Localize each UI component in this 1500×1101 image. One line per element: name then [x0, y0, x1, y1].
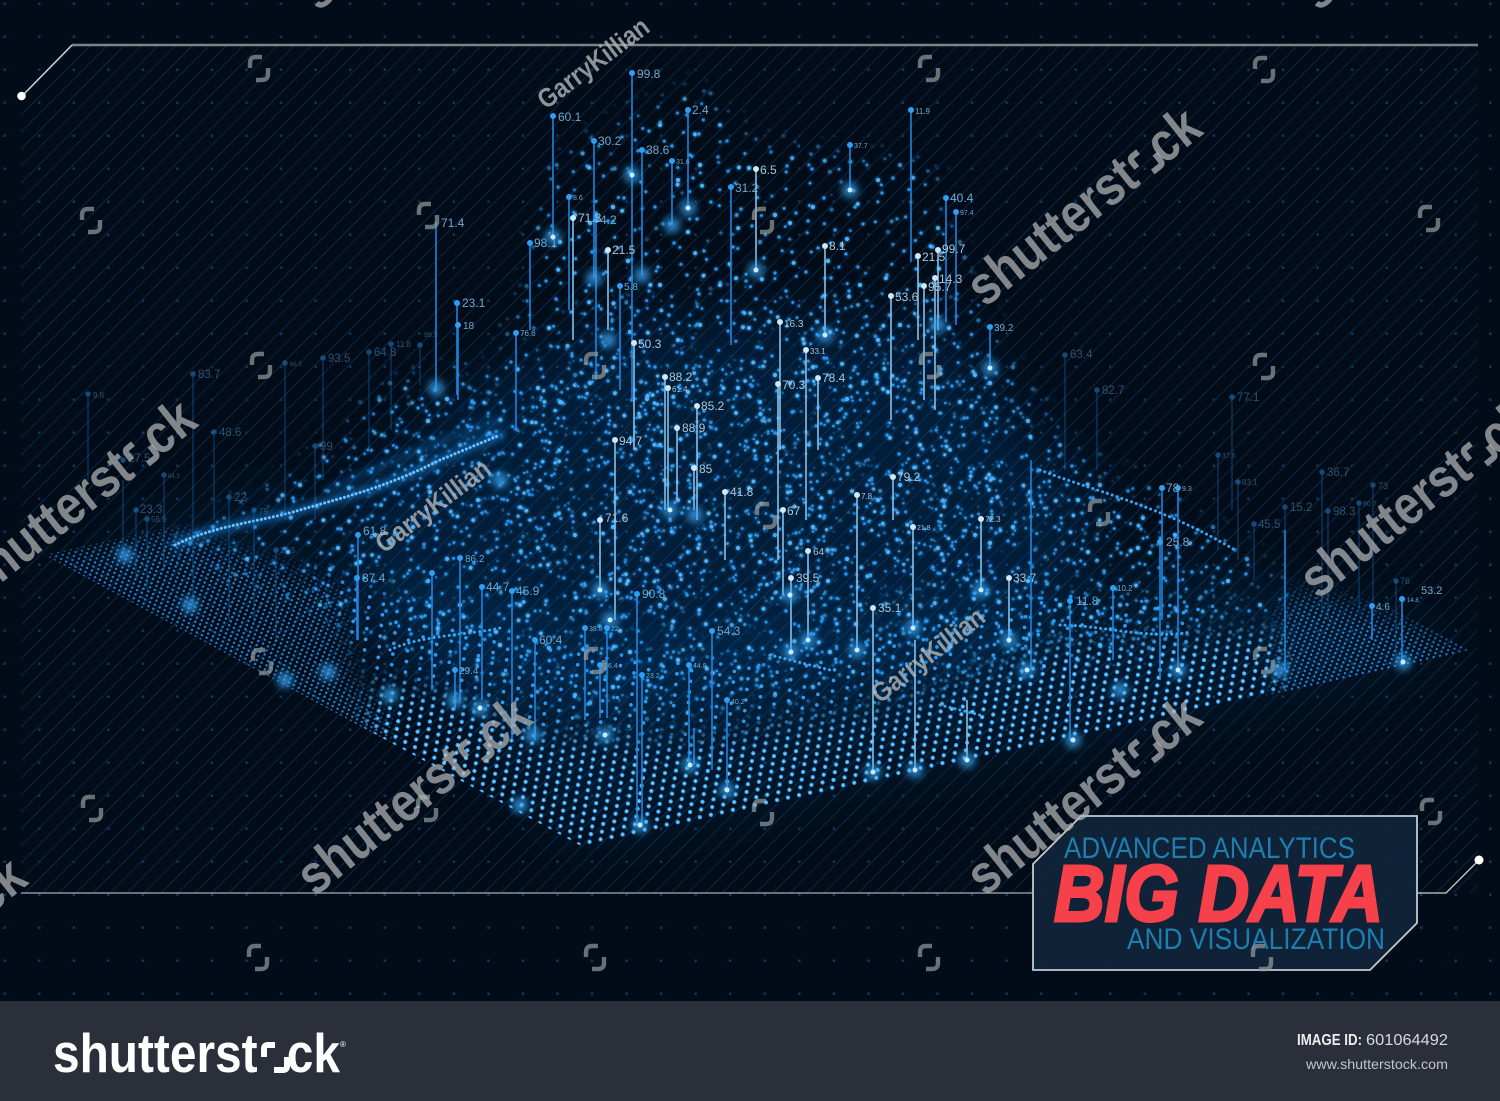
data stems: blue: 22: [611, 626, 619, 633]
data stems: pale bright: 21.8: [917, 525, 931, 532]
data stems: blue: 9.3: [1182, 486, 1192, 493]
data stems: blue: 53.2: [1421, 585, 1442, 597]
image id: 601064492: [1366, 1032, 1448, 1049]
data stems: dim outer: [88, 332, 1410, 660]
plane: near dense grid: [346, 612, 1302, 848]
data stems: blue: 18: [463, 321, 475, 332]
stem base glows: [125, 175, 1403, 825]
data stems: blue: 2.4: [692, 103, 709, 117]
data stems: dim outer: 11.8: [396, 340, 412, 349]
data stems: blue: 60.4: [539, 633, 563, 647]
data stems: pale bright: 99.7: [942, 242, 966, 256]
data stems: blue: 98.1: [534, 236, 558, 250]
data stems: blue: 90.8: [642, 587, 666, 601]
data stems: blue: 14.8: [1407, 598, 1419, 604]
data stems: dim outer: 68.3: [290, 362, 302, 368]
footer logo: ®: [340, 1040, 346, 1049]
data stems: dim outer: 63.4: [1070, 349, 1093, 361]
data stems: pale bright: [573, 163, 1037, 770]
title panel: [1033, 816, 1417, 970]
photographer watermarks: [370, 11, 991, 709]
data stems: dim outer: 83.7: [198, 369, 220, 381]
data stems: blue: 76.6: [520, 329, 536, 338]
data stems: blue: 44.8: [693, 663, 707, 670]
data stems: pale bright: 88.9: [682, 421, 706, 435]
data stems: pale bright: 53.6: [895, 290, 919, 304]
data stems: dim outer: 93.5: [328, 353, 350, 365]
data stems: dim outer: 23.3: [140, 504, 162, 516]
data stems: pale bright: 8.1: [829, 239, 846, 253]
data stems: pale bright: 88.2: [669, 370, 693, 384]
data stems: blue: 23.1: [462, 296, 486, 310]
data stems: pale bright: 6.5: [760, 163, 777, 177]
data stems: blue: 54.3: [717, 624, 741, 638]
data stems: blue: 5.8: [624, 282, 638, 293]
data stems: blue: 60.1: [558, 110, 582, 124]
frame: top line with node: [17, 45, 1478, 100]
data stems: blue: 86.4: [604, 663, 618, 670]
data stems: blue: 86.2: [465, 554, 485, 565]
data stems: pale bright: 16.3: [784, 319, 804, 330]
data stems: pale bright: 35.1: [878, 601, 902, 615]
data stems: dim outer: 56.9: [151, 515, 167, 524]
diagonal hatch panel: [21, 46, 1478, 893]
data stems: pale bright: 67: [787, 504, 801, 518]
data stems: pale bright: 79.2: [897, 470, 921, 484]
footer bar: [0, 1001, 1500, 1101]
data stems: dim outer: 9.8: [93, 391, 105, 400]
3D data terrain visualization: [45, 70, 1468, 848]
data stems: pale bright: 71.6: [605, 511, 629, 525]
data stems: blue: 8.6: [573, 195, 583, 202]
main title: BIG DATA: [1054, 849, 1383, 938]
data stems: pale bright: 33.1: [810, 347, 826, 356]
data stems: dim outer: 84.3: [168, 474, 180, 480]
data stems: blue: 11.8: [1076, 594, 1099, 608]
data stems: blue: 39.2: [994, 323, 1014, 334]
data stems: dim outer: 15.2: [1290, 502, 1312, 514]
data stems: blue: 44.7: [486, 580, 510, 594]
data stems: blue: 25.8: [1166, 535, 1190, 549]
data stems: dim outer: 22: [234, 492, 247, 504]
data stems: pale bright: 21.5: [922, 250, 946, 264]
data stems: pale bright: 7.8: [861, 492, 873, 501]
data stems: dim outer: 99: [320, 441, 333, 453]
data stems: pale bright: 61.4: [672, 385, 688, 394]
subtitle: and visualization: AND VISUALIZATION: [1127, 923, 1385, 956]
data stems: pale bright: 95.7: [928, 280, 952, 294]
data stems: pale bright: 64: [813, 547, 825, 558]
photographer watermarks: GarryKillian: [370, 453, 496, 559]
panel background: [1033, 816, 1417, 970]
data stems: blue: 4.2: [600, 213, 617, 227]
data stems: dim outer: 80.7: [1363, 501, 1377, 508]
data stems: pale bright: 70.3: [782, 378, 806, 392]
data stems: blue: 40.2: [731, 699, 745, 706]
data stems: blue: 30.2: [598, 134, 622, 148]
data stems: blue: 40.4: [950, 191, 974, 205]
data stems: dim outer: 98.3: [1333, 506, 1355, 518]
data stems: pale bright: 85.2: [701, 399, 725, 413]
website: www.shutterstock.com: [1305, 1056, 1448, 1072]
data stems: pale bright: 78.4: [822, 371, 846, 385]
shutterstock diagonal watermarks: shutterstock: [954, 683, 1213, 906]
data stems: dim outer: 76: [1400, 576, 1410, 586]
data stems: blue: 71.4: [441, 216, 465, 230]
data stems: blue: 38.8: [589, 626, 603, 633]
shutterstock diagonal watermarks: shutterstock: [284, 683, 543, 906]
data stems: dim outer: 64.8: [374, 347, 396, 359]
data stems: blue: 97.4: [960, 210, 974, 217]
data stems: blue: 10.2: [1117, 584, 1133, 593]
terrain glow haze: [60, 320, 1460, 840]
data stems: blue: 45.9: [516, 584, 540, 598]
data stems: pale bright: 41.8: [730, 485, 754, 499]
ridge wave: left: [175, 420, 1235, 715]
data stems: pale bright: 33.7: [1013, 571, 1037, 585]
data stems: dim outer: 48.6: [219, 427, 241, 439]
footer logo: shutterstock: [53, 1022, 340, 1084]
data stems: blue: 61.8: [363, 524, 387, 538]
data stems: pale bright: 71.3: [578, 211, 602, 225]
data stems: blue: 4.6: [1376, 602, 1390, 613]
data stems: dim outer: 36.7: [1327, 467, 1349, 479]
data stems: blue: 99.8: [637, 67, 661, 81]
data stems: dim outer: 45.5: [1258, 519, 1280, 531]
data stems: pale bright: 50.3: [638, 337, 662, 351]
data stems: blue: 87.4: [362, 571, 386, 585]
data stems: blue: 31.6: [676, 159, 690, 166]
frame: bottom line with node: [21, 856, 1484, 893]
scattered terrain particles: [170, 70, 1308, 736]
data stems: blue: 31.2: [735, 181, 759, 195]
subtitle: advanced analytics: ADVANCED ANALYTICS: [1064, 832, 1355, 865]
plane: distant corner grids: [45, 520, 1467, 748]
data stems: dim outer: 83.1: [1242, 478, 1258, 487]
data stems: dim outer: 73: [1378, 481, 1388, 491]
image id: IMAGE ID:: [1297, 1032, 1362, 1049]
data stems: pale bright: 39.5: [796, 571, 820, 585]
data stems: dim outer: 37.6: [1222, 453, 1236, 460]
data stems: dim outer: 27.5: [128, 453, 150, 465]
data stems: pale bright: 14.3: [939, 272, 963, 286]
photographer watermarks: GarryKillian: [532, 11, 655, 115]
plane: mid wide grid: [299, 556, 1244, 748]
data stems: dim outer: 99.9: [424, 332, 438, 339]
data stems: pale bright: 94.7: [619, 434, 643, 448]
data stems: blue: 23.2: [646, 673, 660, 680]
data stems: dim outer: 79: [259, 507, 268, 516]
data stems: blue: 78: [1166, 481, 1180, 495]
data stems: pale bright: 72.3: [985, 515, 1001, 524]
data stems: blue: 37.7: [854, 143, 868, 150]
data stems: blue: [357, 67, 1442, 825]
watermark marks: [82, 57, 1440, 969]
data stems: dim outer: 13.5: [280, 546, 296, 555]
data stems: dim outer: 82.7: [1102, 385, 1124, 397]
data stems: blue: 38.6: [646, 143, 670, 157]
data stems: pale bright: 21.5: [612, 243, 636, 257]
data stems: pale bright: 85: [699, 462, 713, 476]
data stems: blue: 11.9: [915, 107, 931, 116]
data stems: blue: 29.4: [459, 666, 479, 677]
shutterstock diagonal watermarks: shutterstock: [954, 94, 1213, 317]
data stems: dim outer: 77.1: [1237, 392, 1259, 404]
photographer watermarks: GarryKillian: [865, 601, 991, 709]
